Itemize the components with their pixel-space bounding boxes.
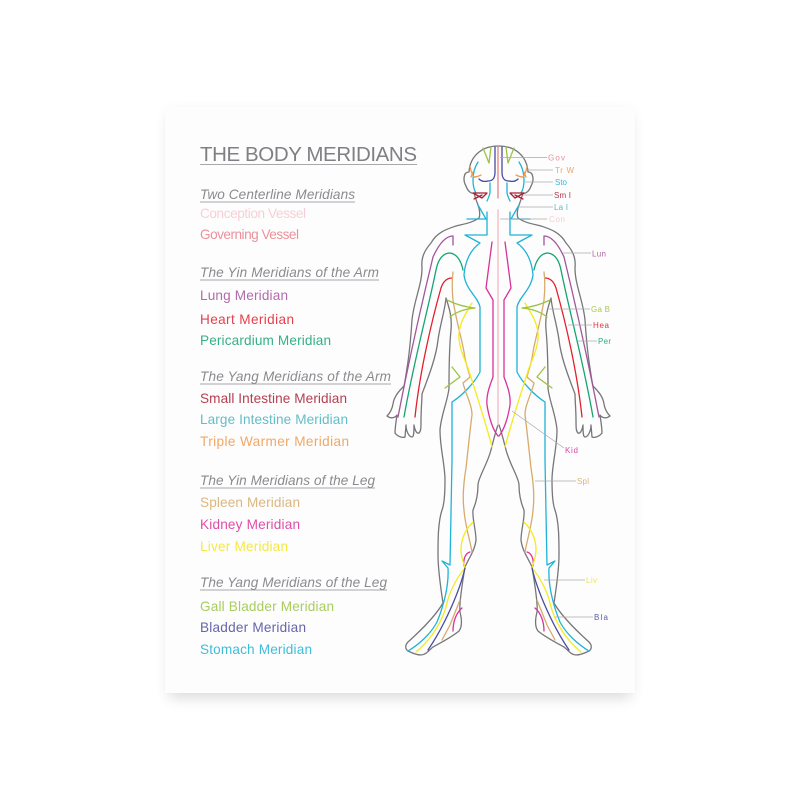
legend: centerline meridians: Two Centerline Meridians	[200, 187, 355, 202]
legend: yin meridians of the arm: Pericardium Meridian	[200, 333, 331, 348]
legend: yang meridians of the leg: The Yang Meridians of the Leg	[200, 575, 387, 590]
legend: yin meridians of the leg: Liver Meridian	[200, 539, 288, 554]
legend: yang meridians of the leg: Bladder Meridian	[200, 620, 306, 635]
body outline	[387, 146, 498, 655]
liver meridian	[459, 303, 492, 447]
stomach meridian: head and neck	[467, 162, 490, 219]
label: La I: La I	[554, 203, 568, 212]
legend: yang meridians of the arm	[200, 369, 391, 449]
bladder meridian: leg	[428, 568, 465, 650]
triple warmer meridian: head	[470, 167, 481, 177]
title: THE BODY MERIDIANS	[200, 143, 417, 166]
pericardium meridian	[404, 253, 463, 417]
label: Sto: Sto	[555, 178, 568, 187]
label: Hea: Hea	[593, 321, 610, 330]
legend: yang meridians of the arm: Small Intestine Meridian	[200, 391, 347, 406]
spleen meridian	[452, 272, 472, 552]
legend: yang meridians of the leg: Stomach Meridian	[200, 642, 312, 657]
label: Con	[500, 215, 565, 224]
legend: centerline meridians: Governing Vessel	[200, 227, 299, 242]
legend: yin meridians of the leg: Kidney Meridian	[200, 517, 300, 532]
legend: yin meridians of the arm: Lung Meridian	[200, 288, 288, 303]
legend: centerline meridians	[200, 187, 355, 242]
legend: yin meridians of the arm	[200, 265, 379, 348]
body diagram: left half	[387, 146, 498, 655]
label: Ga B: Ga B	[591, 305, 610, 314]
spleen meridian: foot	[442, 600, 460, 640]
gall bladder meridian: head	[483, 147, 491, 163]
label: Lun	[563, 250, 606, 258]
lung meridian	[398, 236, 453, 417]
bladder meridian: head	[479, 147, 495, 181]
panel: poster sheet	[165, 107, 635, 693]
label: Gov	[500, 154, 565, 162]
gall bladder meridian	[445, 300, 475, 388]
legend: yin meridians of the leg: The Yin Meridians of the Leg	[200, 473, 375, 488]
label: Tr W: Tr W	[555, 166, 574, 175]
legend: yang meridians of the leg	[200, 575, 387, 657]
legend: yin meridians of the arm: The Yin Meridians of the Arm	[200, 265, 379, 280]
label: Ga B	[549, 305, 610, 314]
legend: yin meridians of the leg: Spleen Meridian	[200, 495, 300, 510]
label: Bla: Bla	[594, 613, 609, 622]
label: Sto	[525, 178, 568, 187]
label: Kid: Kid	[565, 446, 578, 455]
conception vessel centre line	[497, 210, 499, 425]
legend: yin meridians of the arm: Heart Meridian	[200, 312, 294, 327]
legend: yang meridians of the arm: The Yang Meridians of the Arm	[200, 369, 391, 384]
heart meridian	[415, 278, 452, 417]
label: Bla	[555, 613, 609, 622]
label: Liv	[544, 576, 597, 585]
label: Per	[578, 337, 611, 346]
legend: centerline meridians: Conception Vessel	[200, 206, 306, 221]
label: Spl: Spl	[577, 477, 589, 486]
governing vessel centre line	[497, 147, 499, 198]
labels	[500, 154, 611, 622]
legend: yin meridians of the leg	[200, 473, 375, 554]
label: Gov: Gov	[548, 154, 565, 162]
legend: yang meridians of the arm: Triple Warmer Meridian	[200, 434, 349, 449]
kidney meridian	[486, 242, 498, 436]
label: Con: Con	[549, 215, 565, 224]
label: Per: Per	[598, 337, 611, 346]
paper shadow	[169, 114, 631, 698]
label: Sm I	[523, 191, 571, 200]
label: Sm I: Sm I	[554, 191, 571, 200]
kidney meridian: ankle and heel	[453, 552, 470, 631]
stomach meridian	[408, 219, 487, 651]
label: Lun: Lun	[592, 250, 606, 258]
label: Liv: Liv	[586, 576, 597, 585]
label: Spl	[535, 477, 589, 486]
legend: yang meridians of the leg: Gall Bladder Meridian	[200, 599, 334, 614]
label: Tr W	[526, 166, 574, 175]
body diagram: right half mirrored	[499, 146, 610, 655]
small intestine meridian: face	[473, 193, 487, 199]
legend: yang meridians of the arm: Large Intestine Meridian	[200, 412, 348, 427]
label: Kid	[512, 411, 578, 455]
liver meridian: leg	[416, 522, 473, 652]
label: Hea	[568, 321, 610, 330]
label: La I	[518, 203, 568, 212]
